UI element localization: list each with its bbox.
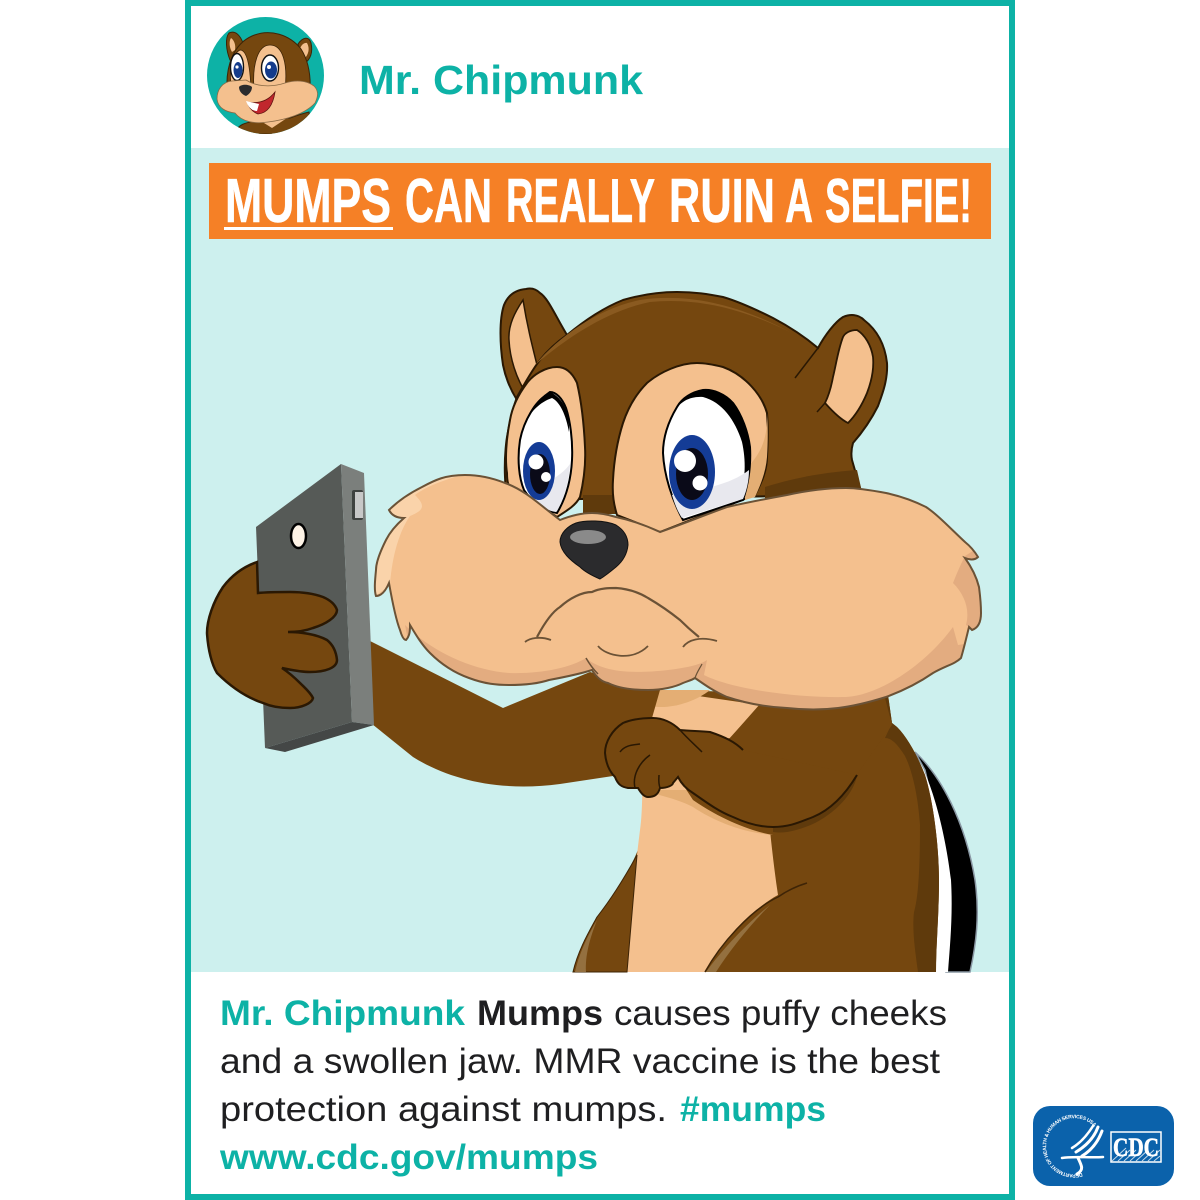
banner: title: CAN — [405, 167, 492, 236]
left eye patch — [506, 367, 585, 517]
lower shadows — [405, 625, 587, 684]
left eye — [519, 392, 572, 513]
logo: HHS and CDC — [1033, 1106, 1174, 1186]
body side shade — [884, 695, 939, 972]
muzzle lines — [537, 588, 699, 637]
banner: title: SELFIE! — [825, 167, 972, 236]
CDC box: CDC — [1113, 1133, 1159, 1162]
text block: description: www.cdc.gov/mumps — [219, 1138, 598, 1177]
middle eye patch — [613, 363, 768, 532]
text block: description: causes puffy cheeks — [614, 994, 947, 1033]
tail stripes — [915, 752, 977, 972]
text block: description — [219, 994, 947, 1177]
banner: title — [209, 163, 991, 239]
body — [575, 690, 939, 972]
text block: description: protection against mumps. — [220, 1090, 667, 1129]
neck shade — [650, 690, 710, 707]
icon: Mr. Chipmunk avatar — [207, 17, 324, 134]
banner: title: REALLY — [506, 167, 655, 236]
icon: HHS eagle — [1062, 1126, 1103, 1174]
right-side arm and paw — [605, 698, 892, 835]
text block: description: #mumps — [680, 1090, 826, 1129]
illustration: chipmunk taking a selfie — [207, 288, 990, 972]
text block: description: and a swollen jaw. MMR vaccine is the best — [220, 1042, 940, 1081]
panel: illustration background — [191, 148, 1009, 972]
banner: title: A — [785, 167, 813, 236]
highlights — [376, 476, 456, 595]
banner: title: RUIN — [669, 167, 775, 236]
banner: title: MUMPS — [225, 167, 391, 236]
left haunch — [573, 855, 637, 972]
text block: description: Mumps — [477, 994, 603, 1033]
belly shadow under arm — [640, 790, 773, 835]
phone — [256, 464, 374, 752]
right eye — [663, 390, 750, 520]
card border — [188, 3, 1012, 1197]
belly — [627, 690, 778, 972]
text block: description: Mr. Chipmunk — [220, 994, 466, 1033]
right haunch line — [705, 883, 807, 972]
cheeks and muzzle — [370, 470, 990, 720]
extended arm — [370, 641, 660, 786]
hand — [207, 562, 337, 708]
seal text: DEPARTMENT OF HEALTH & HUMAN SERVICES USA — [1042, 1114, 1096, 1178]
heading: Mr. Chipmunk: Mr. Chipmunk — [359, 57, 643, 103]
head and ears — [500, 288, 887, 532]
nose — [560, 521, 628, 579]
dark brow bands — [583, 495, 618, 514]
